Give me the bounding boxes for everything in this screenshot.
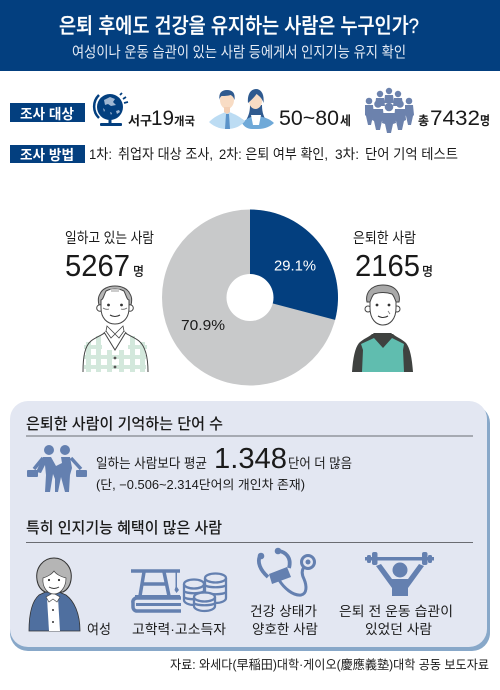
survey method text	[89, 146, 458, 162]
survey method text: 취업자 대상 조사,	[118, 146, 213, 162]
header banner	[0, 0, 500, 71]
stat: countries: 서구	[128, 114, 152, 128]
label: survey subjects: 조사 대상	[20, 106, 74, 122]
value: retired share: 29.1%	[274, 258, 316, 274]
stat: age range: 세	[340, 114, 351, 128]
source note: 자료: 와세다(早稲田)대학·게이오(慶應義塾)대학 공동 보도자료	[170, 657, 489, 672]
text: individual range note: (단, −0.506~2.314단어의 개인차 존재)	[96, 478, 305, 492]
working people label: 일하고 있는 사람	[65, 230, 154, 247]
text: average word gap: 1.348	[214, 443, 287, 475]
icon: man and woman	[209, 89, 274, 129]
icon: retired older man	[352, 285, 413, 372]
icon: two workers shaking hands	[27, 445, 87, 492]
survey method text: 2차: 은퇴 여부 확인,	[219, 146, 328, 162]
stat: total participants: 7432	[430, 107, 480, 130]
working people label: 명	[133, 264, 144, 279]
subtitle: 여성이나 운동 습관이 있는 사람 등에게서 인지기능 유지 확인	[72, 44, 406, 61]
icon: crowd of people	[365, 88, 414, 133]
icon: person lifting barbell	[365, 552, 434, 596]
panel: memory results	[10, 401, 490, 651]
label: education and income: 고학력·고소득자	[132, 622, 227, 637]
stat: countries: 개국	[174, 115, 195, 128]
retired people label: 명	[422, 264, 433, 279]
working people label: 5267	[65, 248, 130, 283]
title: 은퇴 후에도 건강을 유지하는 사람은 누구인가?	[59, 15, 419, 38]
label: survey method	[10, 145, 85, 163]
working people label	[65, 230, 154, 283]
icon: books and coins	[131, 571, 226, 611]
label: exercise habit before retirement: 있었던 사람	[365, 622, 432, 637]
retired people label: 2165	[355, 248, 420, 283]
icon: woman	[29, 558, 80, 631]
stat: total participants	[418, 107, 490, 130]
label: good health	[250, 604, 318, 637]
stat: countries	[128, 107, 195, 130]
label: exercise habit before retirement: 은퇴 전 운동 습관이	[339, 604, 453, 619]
survey method text: 3차:	[335, 146, 359, 162]
label: survey method: 조사 방법	[20, 147, 74, 163]
stat: total participants: 총	[418, 114, 429, 128]
survey method text: 1차:	[89, 146, 112, 162]
label: good health: 양호한 사람	[252, 622, 318, 637]
panel heading: words remembered: 은퇴한 사람이 기억하는 단어 수	[26, 415, 223, 433]
icon: stethoscope	[258, 548, 314, 595]
donut chart	[162, 210, 338, 386]
retired people label: 은퇴한 사람	[353, 230, 416, 247]
label: survey subjects	[10, 103, 85, 122]
stat: age range: 50~80	[279, 107, 339, 130]
value: working share: 70.9%	[181, 317, 225, 334]
icon: working older man	[83, 286, 148, 372]
stat: total participants: 명	[480, 114, 490, 128]
label: good health: 건강 상태가	[250, 604, 317, 619]
stat: countries: 19	[151, 107, 174, 130]
label: exercise habit before retirement	[339, 604, 453, 637]
retired people label	[353, 230, 433, 283]
text: average word gap: 일하는 사람보다 평균	[96, 456, 207, 471]
text: average word gap	[96, 443, 352, 475]
icon: globe	[94, 93, 128, 126]
panel heading: greater cognitive benefit: 특히 인지기능 혜택이 많은 사람	[26, 519, 222, 537]
survey method text: 단어 기억 테스트	[365, 146, 458, 162]
label: women: 여성	[87, 622, 111, 637]
text: average word gap: 단어 더 많음	[288, 456, 352, 471]
